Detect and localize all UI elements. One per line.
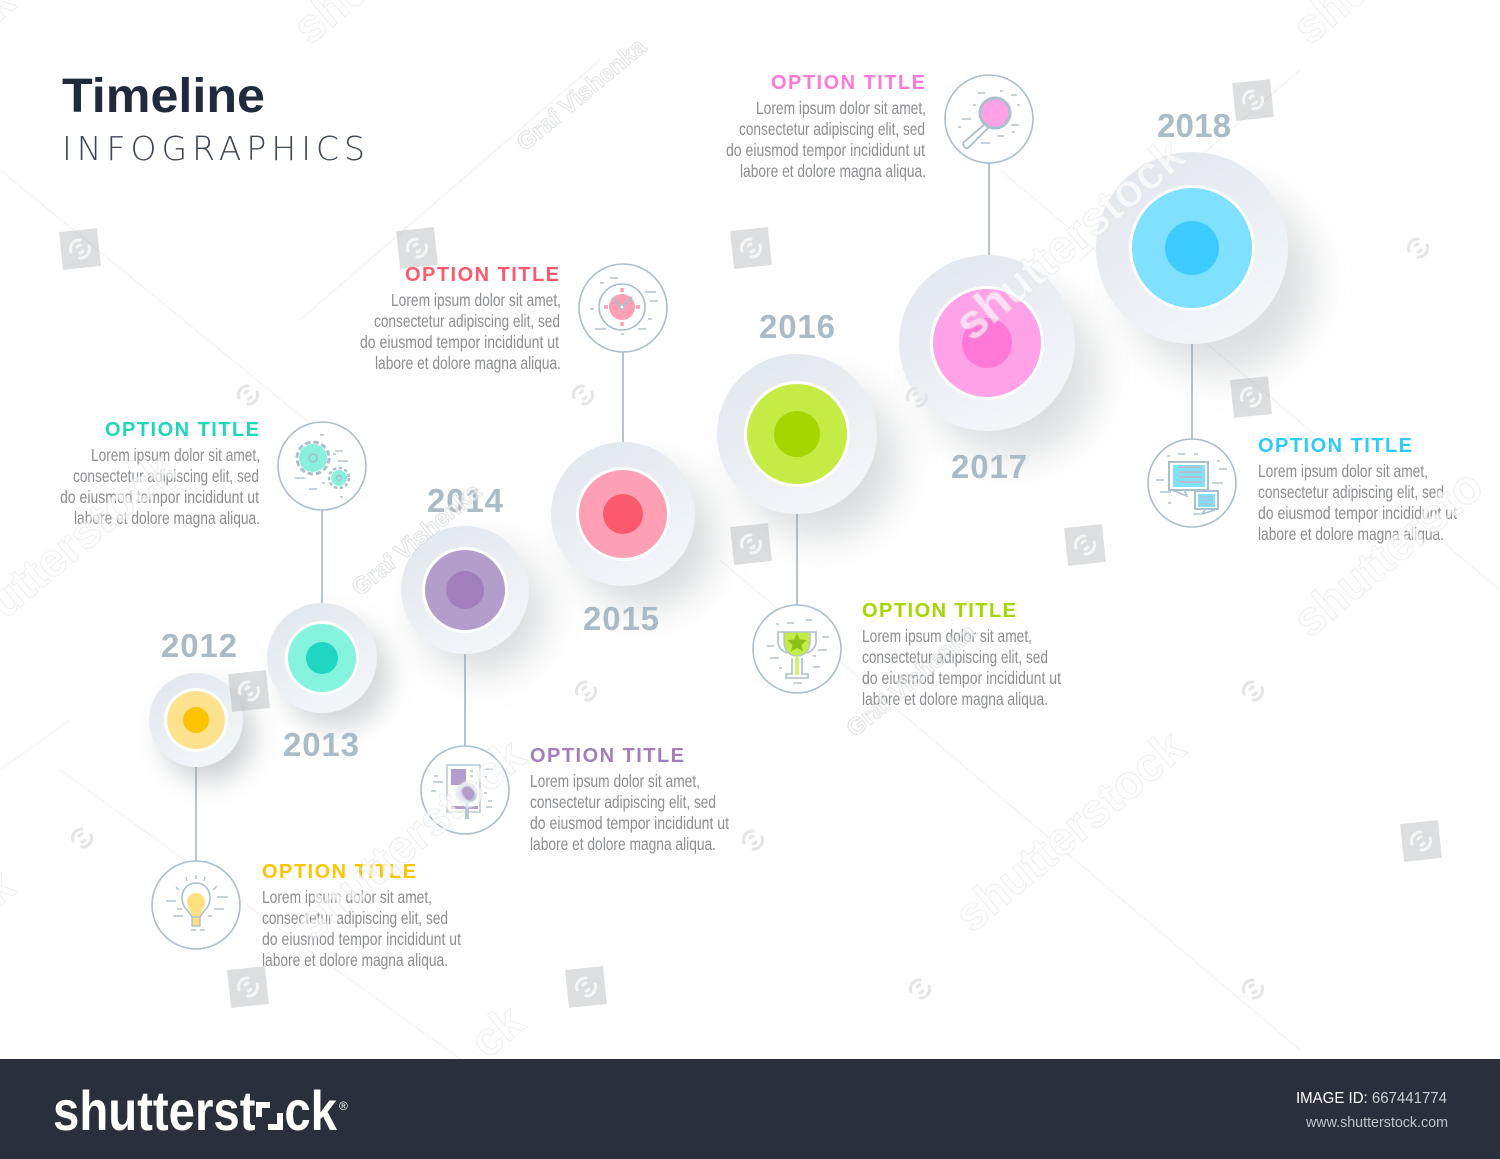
- text block 2013: [60, 419, 260, 528]
- node 2017: [899, 255, 1098, 458]
- website: www.shutterstock.com: [1305, 1114, 1448, 1131]
- footer bar: [0, 1059, 1500, 1159]
- watermark squares: [59, 79, 1442, 1008]
- text block 2017: labore et dolore magna aliqua.: [740, 161, 926, 181]
- icon: trophy: [753, 605, 841, 693]
- text block 2016: Lorem ipsum dolor sit amet,: [862, 626, 1032, 646]
- icon: magnifying glass: [945, 75, 1033, 163]
- text block 2016: OPTION TITLE: [862, 600, 1016, 622]
- title: Timeline: [62, 70, 265, 123]
- text block 2013: consectetur adipiscing elit, sed: [73, 466, 259, 486]
- text block 2015: consectetur adipiscing elit, sed: [374, 311, 560, 331]
- text block 2012: labore et dolore magna aliqua.: [262, 950, 448, 970]
- text block 2016: do eiusmod tempor incididunt ut: [862, 668, 1061, 688]
- icon: document with magnifier: [421, 746, 509, 834]
- text block 2017: do eiusmod tempor incididunt ut: [726, 140, 925, 160]
- shutterstock logo: shutterstock: [53, 1079, 338, 1142]
- text block 2018: [1258, 435, 1457, 544]
- icon: clock: [579, 264, 667, 352]
- text block 2013: do eiusmod tempor incididunt ut: [60, 487, 259, 507]
- year labels: 2018: [1157, 107, 1231, 144]
- text block 2013: Lorem ipsum dolor sit amet,: [91, 445, 260, 465]
- text block 2014: Lorem ipsum dolor sit amet,: [530, 771, 700, 791]
- text block 2016: consectetur adipiscing elit, sed: [862, 647, 1048, 667]
- text block 2018: Lorem ipsum dolor sit amet,: [1258, 461, 1428, 481]
- text block 2016: labore et dolore magna aliqua.: [862, 689, 1048, 709]
- text block 2017: Lorem ipsum dolor sit amet,: [756, 98, 926, 118]
- year labels: 2014: [427, 482, 504, 519]
- watermark text: Graf Vishenka: [347, 478, 487, 602]
- year labels: [161, 107, 1231, 763]
- text block 2017: OPTION TITLE: [771, 72, 925, 94]
- image id: IMAGE ID: 667441774: [1296, 1090, 1447, 1107]
- text block 2015: OPTION TITLE: [405, 264, 559, 286]
- shutterstock logo: ®: [339, 1099, 348, 1113]
- watermark text: shutterstock: [284, 727, 535, 950]
- text block 2018: consectetur adipiscing elit, sed: [1258, 482, 1444, 502]
- watermark text: Graf Vishenka: [512, 33, 652, 157]
- node 2014: [401, 526, 544, 672]
- watermark text: ck: [459, 993, 534, 1068]
- text block 2015: do eiusmod tempor incididunt ut: [360, 332, 559, 352]
- text block 2017: consectetur adipiscing elit, sed: [739, 119, 925, 139]
- connector lines: [196, 163, 1192, 861]
- watermark text: shutterstock: [944, 127, 1195, 350]
- text block 2013: labore et dolore magna aliqua.: [74, 508, 260, 528]
- year labels: 2016: [759, 308, 835, 345]
- text block 2012: Lorem ipsum dolor sit amet,: [262, 887, 432, 907]
- year labels: 2015: [583, 600, 659, 637]
- text block 2015: labore et dolore magna aliqua.: [375, 353, 561, 373]
- text block 2016: [862, 600, 1061, 709]
- node 2013: [267, 603, 390, 729]
- node 2018: [1096, 152, 1314, 374]
- year labels: 2012: [161, 627, 237, 664]
- watermark small swirls: [72, 239, 1428, 998]
- year labels: 2013: [283, 726, 359, 763]
- text block 2012: [262, 861, 461, 970]
- text block 2012: consectetur adipiscing elit, sed: [262, 908, 448, 928]
- watermark square swirls: [70, 91, 1431, 996]
- text block 2015: Lorem ipsum dolor sit amet,: [391, 290, 561, 310]
- text block 2014: consectetur adipiscing elit, sed: [530, 792, 716, 812]
- text block 2018: OPTION TITLE: [1258, 435, 1412, 457]
- title: [62, 70, 365, 168]
- text block 2013: OPTION TITLE: [105, 419, 259, 441]
- watermark text: shuttersto: [1282, 458, 1492, 647]
- watermark text: Graf Vishenka: [842, 619, 982, 743]
- icon: light bulb: [152, 861, 240, 949]
- watermark text: shutterstock: [944, 719, 1195, 942]
- node 2015: [551, 442, 714, 608]
- year labels: 2017: [951, 448, 1027, 485]
- text block 2015: [360, 264, 561, 373]
- text block 2018: labore et dolore magna aliqua.: [1258, 524, 1444, 544]
- text block 2014: labore et dolore magna aliqua.: [530, 834, 716, 854]
- text block 2014: [530, 745, 729, 854]
- text block 2012: OPTION TITLE: [262, 861, 416, 883]
- text block 2017: [726, 72, 926, 181]
- text block 2012: do eiusmod tempor incididunt ut: [262, 929, 461, 949]
- node 2016: [717, 354, 898, 538]
- text block 2018: do eiusmod tempor incididunt ut: [1258, 503, 1457, 523]
- text block 2014: do eiusmod tempor incididunt ut: [530, 813, 729, 833]
- icon: chat screens: [1148, 439, 1236, 527]
- title: INFOGRAPHICS: [62, 129, 365, 168]
- icon: gears: [278, 422, 366, 510]
- node 2012: [149, 673, 254, 781]
- text block 2014: OPTION TITLE: [530, 745, 684, 767]
